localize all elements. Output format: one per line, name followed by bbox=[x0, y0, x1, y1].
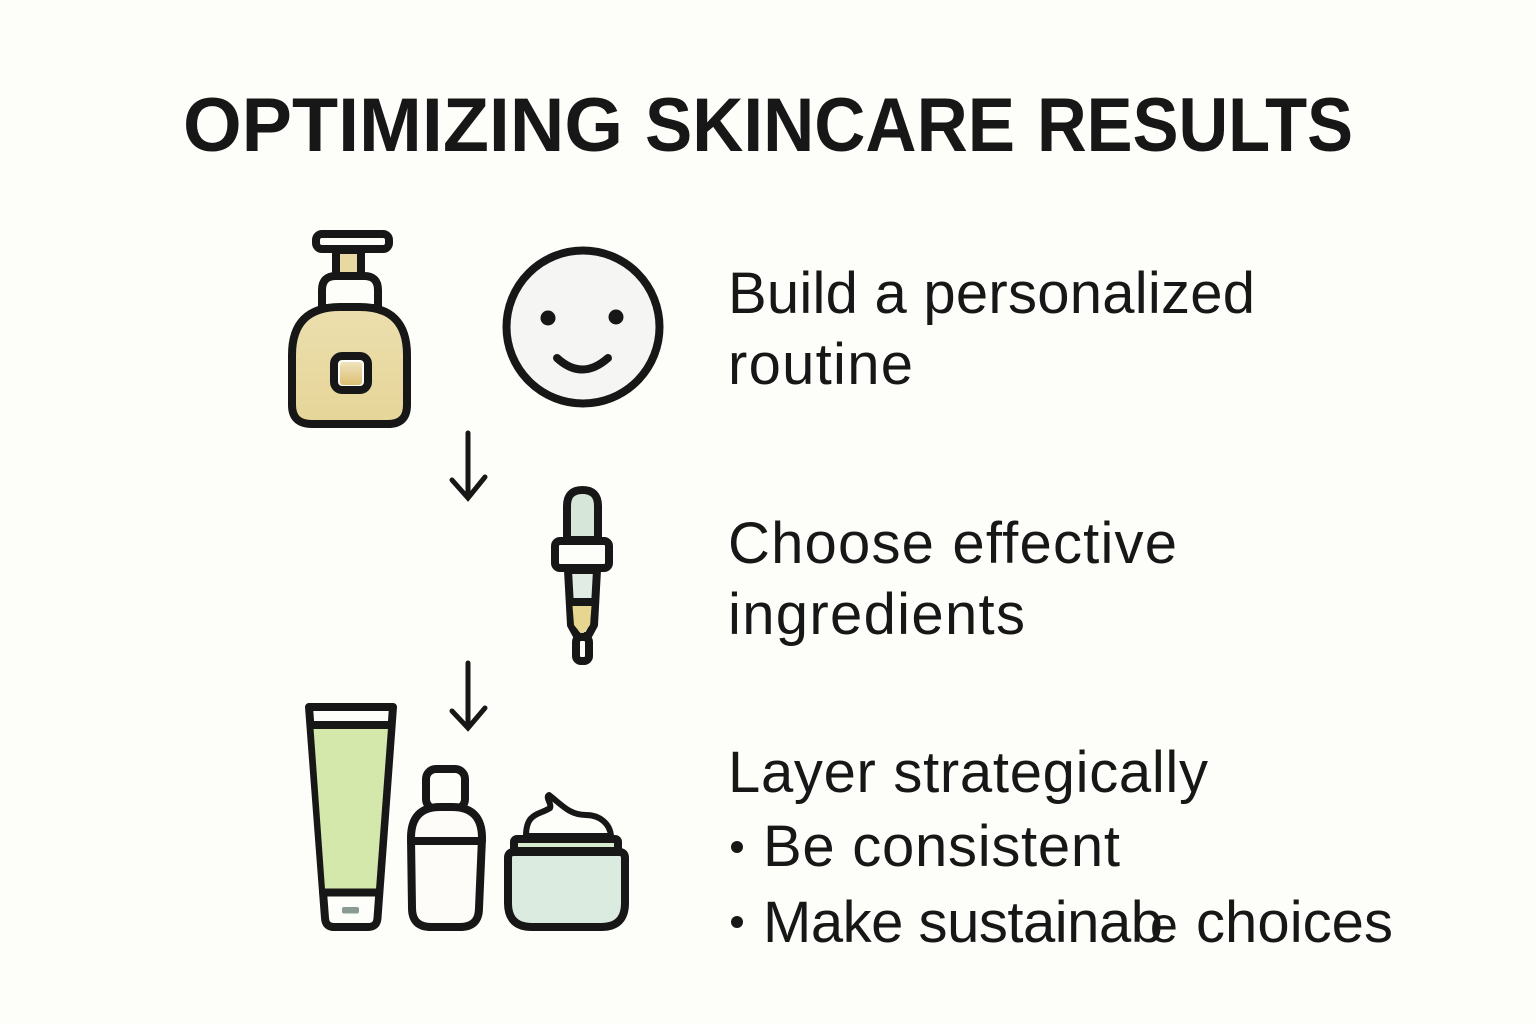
icon: smiling face bbox=[506, 250, 660, 404]
icon: pump bottle bbox=[292, 234, 407, 424]
text: build a personalized routine: Build a personalized bbox=[728, 261, 1255, 326]
text: layer strategically with bullets: Layer strategically bbox=[728, 740, 1208, 805]
text: layer strategically with bullets: e bbox=[1150, 897, 1178, 953]
icon: bottle bbox=[411, 769, 482, 927]
title: RESULTS bbox=[1037, 83, 1353, 168]
text: choose effective ingredients: ingredients bbox=[728, 582, 1025, 647]
text: build a personalized routine: routine bbox=[728, 332, 913, 397]
text: layer strategically with bullets bbox=[728, 740, 1393, 955]
text: layer strategically with bullets: Make sustainab bbox=[763, 890, 1163, 955]
text: choose effective ingredients: Choose effective bbox=[728, 511, 1177, 576]
title bbox=[183, 83, 1353, 168]
title: SKINCARE bbox=[645, 83, 1015, 168]
text: layer strategically with bullets: Be consistent bbox=[763, 814, 1120, 879]
arrow: step two to step three bbox=[452, 663, 485, 728]
icon: dropper bbox=[555, 490, 609, 661]
text: choose effective ingredients bbox=[728, 511, 1177, 647]
text: layer strategically with bullets: choices bbox=[1196, 890, 1393, 955]
icon: tube bbox=[309, 707, 393, 927]
text: build a personalized routine bbox=[728, 261, 1255, 397]
title: OPTIMIZING bbox=[183, 83, 623, 168]
icon: cream jar bbox=[508, 795, 625, 927]
arrow: step one to step two bbox=[452, 433, 485, 498]
